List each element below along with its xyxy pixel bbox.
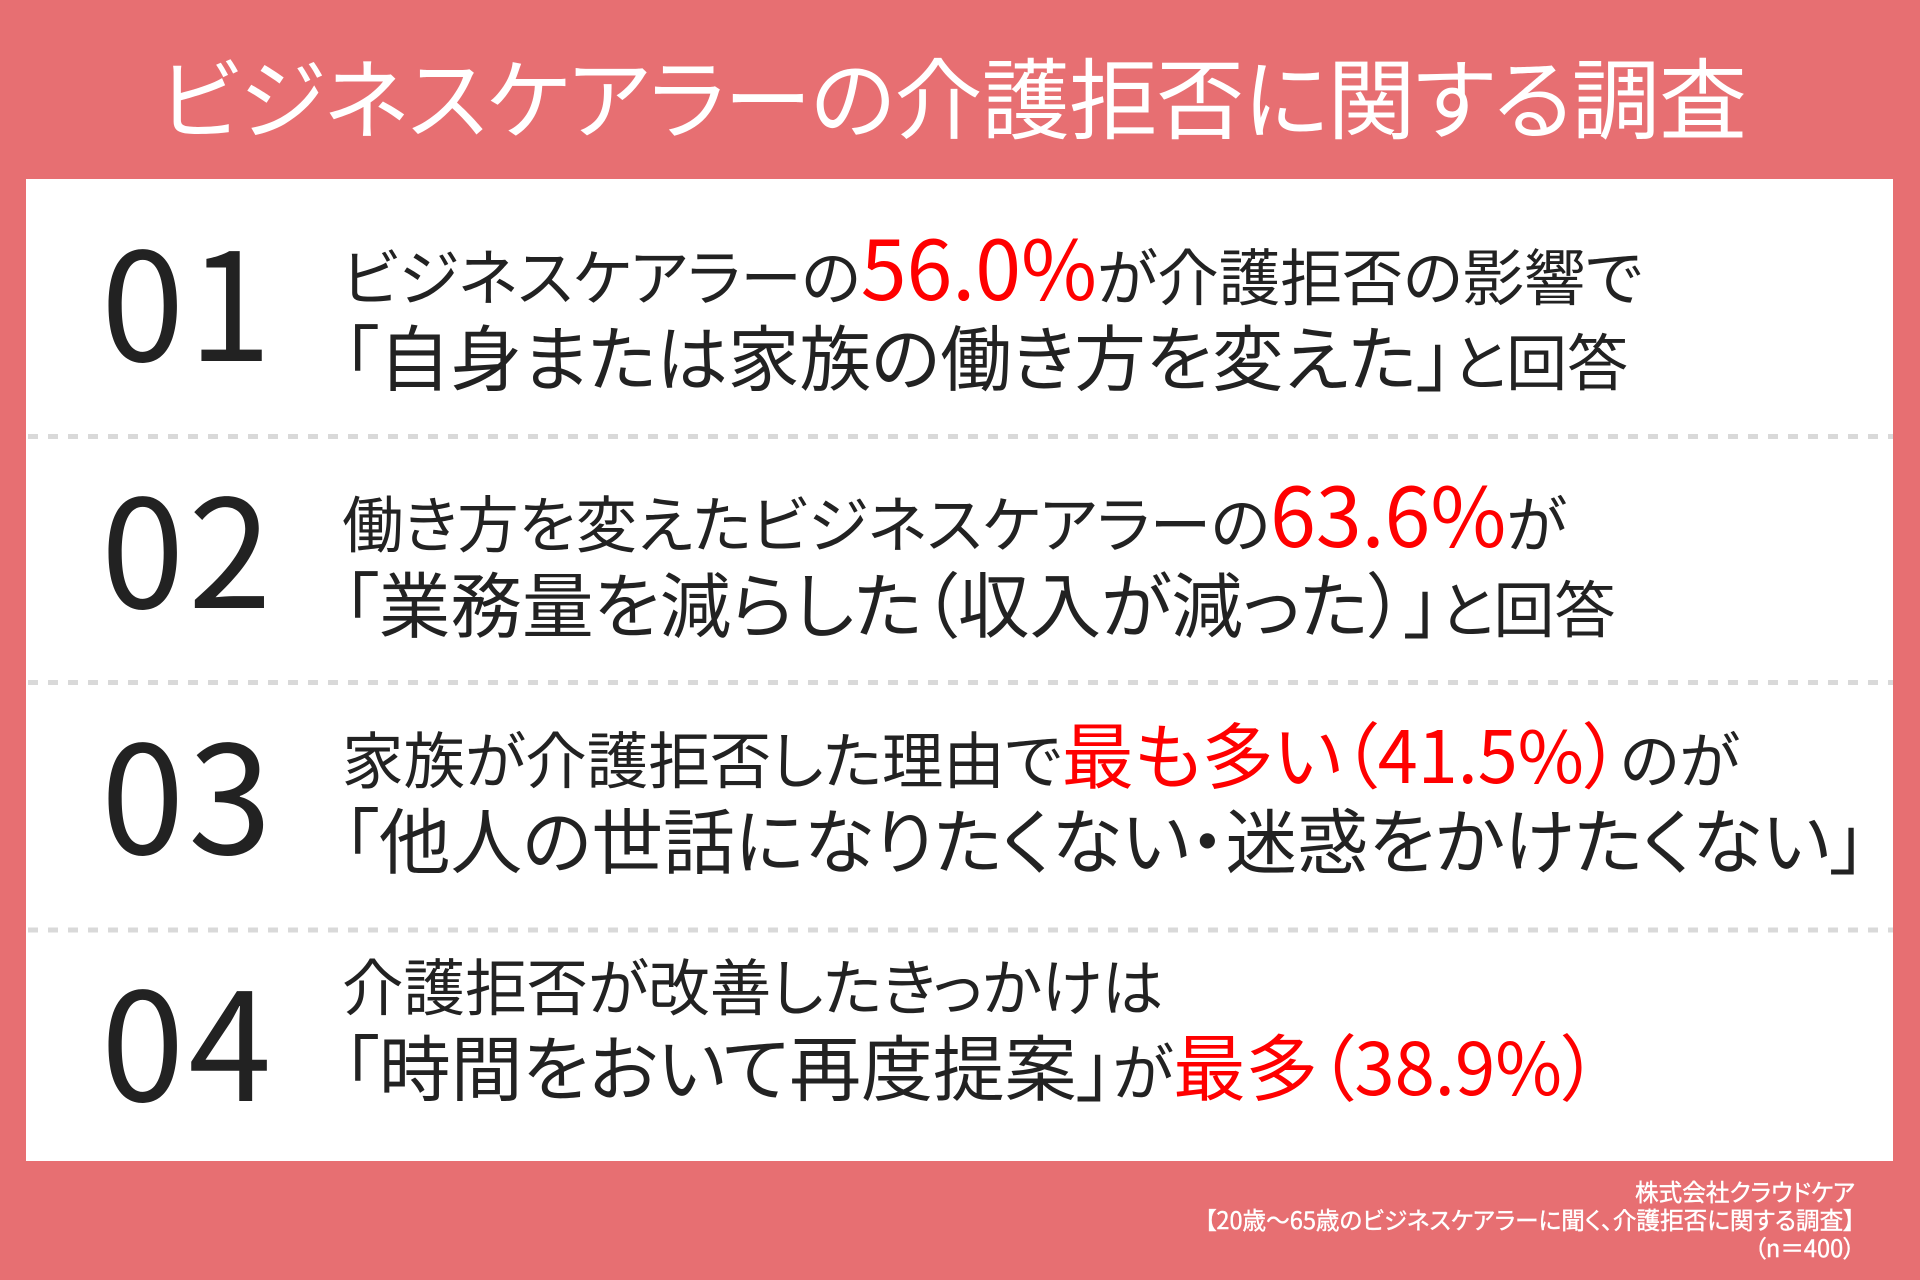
finding 02 (101, 435, 1615, 653)
finding 01 text: 「自身または家族の働き方を変えた」と回答 (343, 302, 1628, 406)
finding 03 text: 「他人の世話になりたくない・迷惑をかけたくない」 (343, 785, 1866, 889)
finding 04 text (342, 939, 1598, 1116)
finding 04 text: 介護拒否が改善したきっかけは (342, 939, 1163, 1028)
number 04: 04 (101, 928, 276, 1145)
title: ビジネスケアラーの介護拒否に関する調査 (159, 31, 1747, 158)
finding 01 (101, 188, 1642, 406)
panel: findings (26, 179, 1893, 1161)
finding 02 text: 「業務量を減らした（収入が減った）」と回答 (343, 549, 1615, 653)
number 03: 03 (101, 681, 276, 898)
source note: （n＝400） (1754, 1230, 1855, 1264)
finding 03 (101, 681, 1866, 898)
source note (1205, 1174, 1855, 1264)
number 02: 02 (101, 435, 276, 652)
finding 01 text: ビジネスケアラーの56.0%が介護拒否の影響で (342, 204, 1642, 324)
finding 03 text (342, 699, 1866, 889)
finding 02 text (342, 451, 1615, 653)
finding 04 text: 「時間をおいて再度提案」が最多（38.9%） (343, 1011, 1598, 1116)
number 01: 01 (101, 188, 276, 405)
finding 04 (101, 928, 1598, 1145)
source note: 株式会社クラウドケア (1635, 1174, 1855, 1208)
finding 01 text (342, 204, 1642, 406)
finding 03 text: 家族が介護拒否した理由で最も多い（41.5%）のが (342, 699, 1739, 804)
finding 02 text: 働き方を変えたビジネスケアラーの63.6%が (342, 451, 1567, 571)
source note: 【20歳～65歳のビジネスケアラーに聞く、介護拒否に関する調査】 (1205, 1202, 1855, 1236)
